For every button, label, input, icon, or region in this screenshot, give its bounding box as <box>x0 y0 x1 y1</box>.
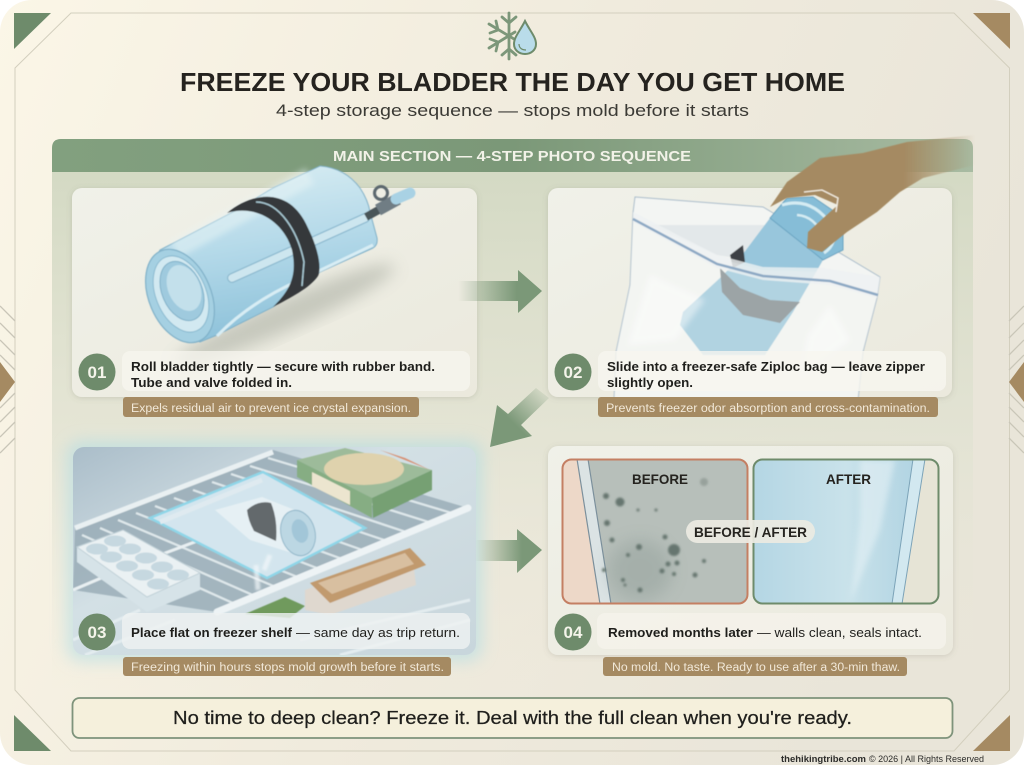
footer credit: © 2026 | All Rights Reserved <box>869 754 984 765</box>
step number <box>554 354 592 390</box>
arrow: step 2 to 3 <box>490 388 549 447</box>
corner triangle bottom left <box>14 715 51 751</box>
illustration: ziploc bag <box>614 197 880 400</box>
step text: Removed months later <box>608 625 753 640</box>
text plate <box>598 351 946 391</box>
step number: 04 <box>564 623 583 642</box>
shelf wires <box>82 458 455 604</box>
right edge chevrons and diamond <box>1009 306 1024 453</box>
illustration: hand <box>770 135 975 252</box>
illustration: freezer shelf <box>73 448 470 655</box>
step text: Tube and valve folded in. <box>131 375 292 390</box>
green package <box>245 597 305 618</box>
corner triangle top left <box>14 13 51 49</box>
after panel: AFTER <box>826 471 871 487</box>
before panel: BEFORE <box>632 471 688 487</box>
step text: — same day as trip return. <box>296 625 460 640</box>
illustration: rolled bladder <box>144 165 416 352</box>
step number <box>78 614 116 650</box>
arrow: step 1 to 2 <box>458 270 542 313</box>
green frozen box <box>297 448 432 518</box>
step number <box>78 354 116 390</box>
lower shelf <box>73 600 470 655</box>
rubber band seen through bag <box>720 268 800 323</box>
step number: 01 <box>88 363 106 382</box>
step text: — walls clean, seals intact. <box>757 625 922 640</box>
section header bar <box>52 139 973 172</box>
card <box>548 188 952 397</box>
corner triangle top right <box>973 13 1010 49</box>
step text: slightly open. <box>607 375 693 390</box>
shelf bars <box>75 452 273 528</box>
tan note <box>603 657 907 676</box>
step text: Slide into a freezer-safe Ziploc bag — leave zipper <box>607 359 925 374</box>
step 2 <box>548 135 975 417</box>
step number: 02 <box>564 363 582 382</box>
bag back <box>614 197 880 400</box>
rubber bands <box>227 197 320 307</box>
glow <box>67 441 482 661</box>
arrow: step 3 to 4 <box>475 529 542 573</box>
section header text: MAIN SECTION — 4-STEP PHOTO SEQUENCE <box>333 148 691 165</box>
tan note <box>598 397 938 417</box>
before panel <box>562 459 748 604</box>
step 3 <box>67 441 482 676</box>
footer credit: thehikingtribe.com <box>781 754 866 765</box>
bag front <box>680 263 809 351</box>
step text: Roll bladder tightly — secure with rubber band. <box>131 359 435 374</box>
frozen bag with roll <box>150 472 365 590</box>
step text <box>607 359 925 390</box>
step text: Place flat on freezer shelf <box>131 625 293 640</box>
footer credit <box>781 754 984 765</box>
card <box>73 447 476 655</box>
step number: 03 <box>88 623 106 642</box>
text plate <box>122 351 470 391</box>
icon: snowflake and water drop <box>489 13 536 59</box>
rolled bladder in bag <box>680 218 823 355</box>
food tray <box>305 548 426 615</box>
tan note: No mold. No taste. Ready to use after a 30-min thaw. <box>612 662 900 674</box>
zipper strip <box>633 212 880 298</box>
step text <box>608 625 922 640</box>
after panel <box>753 459 939 604</box>
ice cube tray <box>77 530 200 612</box>
tan note <box>123 397 419 417</box>
step text <box>131 359 435 390</box>
step number <box>554 614 592 650</box>
step text <box>131 625 460 640</box>
tan note: Freezing within hours stops mold growth before it starts. <box>131 662 444 674</box>
card <box>72 188 477 397</box>
corner triangle bottom right <box>973 715 1010 751</box>
before / after pill <box>686 520 815 543</box>
step 4 <box>548 446 953 676</box>
tan note: Expels residual air to prevent ice crystal expansion. <box>131 403 411 415</box>
subtitle: 4-step storage sequence — stops mold before it starts <box>276 101 749 120</box>
text plate <box>122 613 470 649</box>
step 1 <box>72 166 477 417</box>
panel: main section <box>52 139 973 690</box>
title: FREEZE YOUR BLADDER THE DAY YOU GET HOME <box>180 67 845 97</box>
callout: bottom banner: No time to deep clean? Freeze it. Deal with the full clean when you're ready. <box>173 707 852 728</box>
callout: bottom banner <box>72 698 952 738</box>
mold spots <box>602 478 708 592</box>
tube and valve <box>232 186 410 278</box>
text plate <box>597 613 946 649</box>
tan note: Prevents freezer odor absorption and cross-contamination. <box>606 403 930 415</box>
before / after pill: BEFORE / AFTER <box>694 524 807 540</box>
panel body <box>52 160 973 690</box>
card <box>548 446 953 655</box>
left edge chevrons and diamond <box>0 306 15 453</box>
shelf base <box>73 450 468 612</box>
tan note <box>123 657 451 676</box>
